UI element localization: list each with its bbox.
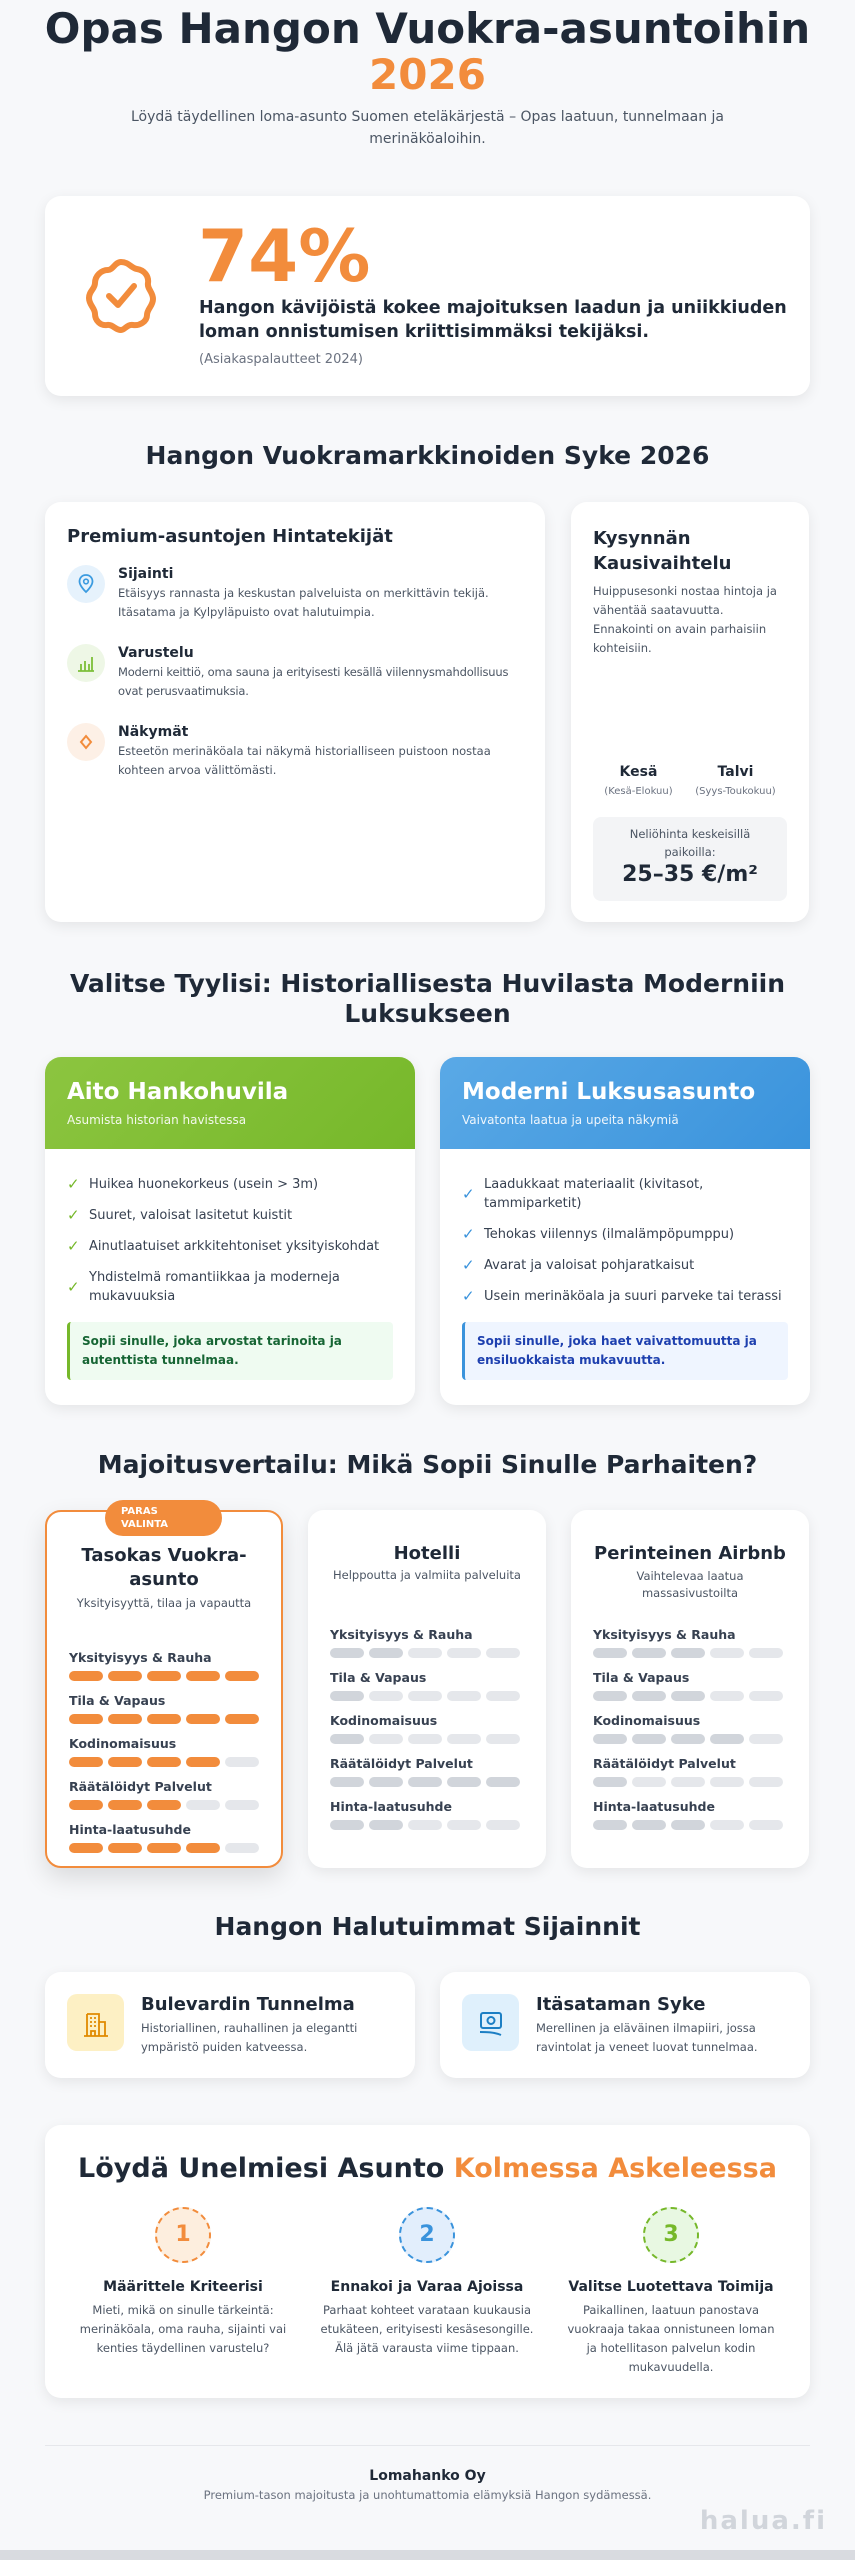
header — [440, 1057, 810, 1149]
stat number: 74% — [198, 214, 370, 298]
ratings: Tila & Vapaus — [69, 1693, 165, 1708]
description: Huippusesonki nostaa hintoja ja vähentää saatavuutta. Ennakointi on avain parhaisiin kohteisiin. — [593, 584, 777, 655]
badge: VALINTA — [121, 1519, 168, 1530]
step 2: Ennakoi ja Varaa Ajoissa — [331, 2279, 523, 2295]
subtitle: Löydä täydellinen loma-asunto Suomen eteläkärjestä – Opas laatuun, tunnelmaan ja merinäköaloihin. — [131, 109, 724, 147]
checklist: ✓ — [67, 1175, 80, 1193]
factor: varustelu: Varustelu — [118, 645, 194, 661]
panel: price factors — [45, 502, 545, 922]
step 1 — [80, 2207, 286, 2355]
panel: Perinteinen Airbnb — [571, 1510, 809, 1868]
heading: Premium-asuntojen Hintatekijät — [67, 526, 393, 547]
ratings: Kodinomaisuus — [330, 1713, 437, 1728]
callout — [67, 1322, 393, 1380]
panel: Tasokas Vuokra-asunto — [45, 1510, 283, 1868]
header: Aito Hankohuvila — [67, 1079, 288, 1105]
panel: three steps — [45, 2125, 810, 2398]
watermark: halua.fi — [700, 2506, 827, 2536]
callout: Sopii sinulle, joka haet vaivattomuutta ja ensiluokkaista mukavuutta. — [477, 1334, 757, 1367]
factor: näkymät: Näkymät — [118, 724, 188, 740]
factor: sijainti: Etäisyys rannasta ja keskustan palveluista on merkittävin tekijä. Itäsatama ja Kylpyläpuisto ovat halutuimpia. — [118, 586, 489, 619]
step 1: Määrittele Kriteerisi — [103, 2279, 263, 2295]
panel: Hotelli: Helppoutta ja valmiita palveluita — [333, 1568, 521, 1582]
step 3: Valitse Luotettava Toimija — [568, 2279, 774, 2295]
footer: Lomahanko Oy — [369, 2468, 486, 2484]
panel: Tasokas Vuokra-asunto: Yksityisyyttä, tilaa ja vapautta — [77, 1596, 251, 1610]
heading: Kysynnän Kausivaihtelu — [593, 528, 731, 574]
seasons: Kesä — [620, 764, 657, 780]
factor: sijainti — [67, 565, 489, 619]
ratings — [330, 1627, 520, 1830]
checklist: Usein merinäköala ja suuri parveke tai terassi — [484, 1289, 782, 1304]
title: Opas Hangon Vuokra-asuntoihin — [45, 4, 810, 53]
checklist: ✓ — [462, 1256, 475, 1274]
checklist: Ainutlaatuiset arkkitehtoniset yksityiskohdat — [89, 1239, 379, 1254]
stat text — [199, 298, 787, 367]
seasons: Talvi — [718, 764, 753, 780]
step 2 — [321, 2207, 533, 2355]
checklist: ✓ — [462, 1184, 475, 1202]
section heading: locations: Hangon Halutuimmat Sijainnit — [215, 1912, 640, 1941]
panel: Itäsataman Syke: Merellinen ja eläväinen ilmapiiri, jossa ravintolat ja veneet luovat tunnelmaa. — [536, 2021, 758, 2054]
step 1: Mieti, mikä on sinulle tärkeintä: merinäköala, oma rauha, sijainti vai kenties täydellinen varustelu? — [80, 2303, 286, 2355]
ratings — [592, 1627, 783, 1830]
heading: Löydä Unelmiesi Asunto Kolmessa Askeleessa — [78, 2153, 777, 2184]
checklist: ✓ — [462, 1287, 475, 1305]
panel: seasonal demand — [571, 502, 809, 922]
step 2: Parhaat kohteet varataan kuukausia etukäteen, erityisesti kesäsesongille. Älä jätä varausta viime tippaan. — [321, 2303, 533, 2355]
factor: varustelu: Moderni keittiö, oma sauna ja erityisesti kesällä viilennysmahdollisuus ovat perusvaatimuksia. — [118, 665, 508, 698]
factor: varustelu — [67, 644, 508, 698]
ratings: Tila & Vapaus — [330, 1670, 426, 1685]
stat text: Hangon kävijöistä kokee majoituksen laadun ja uniikkiuden loman onnistumisen kriittisimmäksi tekijäksi. — [199, 298, 787, 342]
ratings: Räätälöidyt Palvelut — [593, 1756, 736, 1771]
ratings: Hinta-laatusuhde — [69, 1822, 191, 1837]
ratings — [68, 1650, 259, 1853]
ratings: Kodinomaisuus — [593, 1713, 700, 1728]
factor: näkymät — [67, 723, 491, 777]
panel: Hotelli — [308, 1510, 546, 1868]
checklist: ✓ — [67, 1206, 80, 1224]
step 2: 2 — [419, 2222, 435, 2247]
seasons: (Kesä-Elokuu) — [604, 786, 673, 797]
callout — [462, 1322, 788, 1380]
panel: Aito Hankohuvila — [45, 1057, 415, 1405]
header: Moderni Luksusasunto — [462, 1079, 755, 1105]
ratings: Tila & Vapaus — [593, 1670, 689, 1685]
stat card — [45, 196, 810, 396]
title — [45, 4, 810, 99]
section heading: style — [70, 969, 785, 1028]
ratings: Räätälöidyt Palvelut — [330, 1756, 473, 1771]
step 3: 3 — [663, 2222, 679, 2247]
stat text: (Asiakaspalautteet 2024) — [199, 352, 363, 367]
icon: harbour — [462, 1994, 519, 2051]
step 1: 1 — [175, 2222, 191, 2247]
panel: Hotelli: Hotelli — [394, 1543, 460, 1564]
step 3 — [567, 2207, 775, 2374]
price box: Neliöhinta keskeisillä paikoilla: — [630, 827, 750, 859]
panel: Itäsataman Syke: Itäsataman Syke — [536, 1994, 705, 2015]
panel: Moderni Luksusasunto — [440, 1057, 810, 1405]
checklist: Yhdistelmä romantiikkaa ja moderneja mukavuuksia — [89, 1270, 340, 1304]
step 3: Paikallinen, laatuun panostava vuokraaja takaa onnistuneen loman ja hotellitason palvelun kodin mukavuudella. — [567, 2303, 775, 2374]
icon: badge check — [86, 259, 156, 333]
ratings: Yksityisyys & Rauha — [593, 1627, 736, 1642]
checklist: Suuret, valoisat lasitetut kuistit — [89, 1208, 292, 1223]
checklist: ✓ — [67, 1237, 80, 1255]
ratings: Hinta-laatusuhde — [593, 1799, 715, 1814]
icon: building — [67, 1994, 124, 2051]
price box — [593, 817, 787, 901]
checklist: ✓ — [462, 1225, 475, 1243]
panel: Bulevardin Tunnelma: Historiallinen, rauhallinen ja elegantti ympäristö puiden katveessa. — [141, 2021, 357, 2054]
section heading: style: Luksukseen — [344, 999, 511, 1028]
badge — [105, 1500, 222, 1536]
header: Vaivatonta laatua ja upeita näkymiä — [462, 1113, 679, 1127]
badge: PARAS — [121, 1506, 158, 1517]
panel: Bulevardin Tunnelma: Bulevardin Tunnelma — [141, 1994, 355, 2015]
ratings: Hinta-laatusuhde — [330, 1799, 452, 1814]
title: 2026 — [369, 50, 486, 99]
factor: näkymät: Esteetön merinäköala tai näkymä historialliseen puistoon nostaa kohteen arvoa välittömästi. — [118, 744, 491, 777]
ratings: Kodinomaisuus — [69, 1736, 176, 1751]
section heading: comparison: Majoitusvertailu: Mikä Sopii Sinulle Parhaiten? — [98, 1450, 757, 1479]
checklist: ✓ — [67, 1278, 80, 1296]
checklist: Laadukkaat materiaalit (kivitasot, tammiparketit) — [484, 1177, 703, 1211]
checklist — [67, 1175, 393, 1380]
heading: Tasokas Vuokra-asunto — [81, 1545, 247, 1590]
footer — [204, 2468, 651, 2502]
callout: Sopii sinulle, joka arvostat tarinoita ja autenttista tunnelmaa. — [82, 1334, 342, 1367]
header — [45, 1057, 415, 1149]
header: Asumista historian havistessa — [67, 1113, 246, 1127]
price box: 25–35 €/m² — [622, 862, 758, 887]
ratings: Yksityisyys & Rauha — [69, 1650, 212, 1665]
checklist: Avarat ja valoisat pohjaratkaisut — [484, 1258, 694, 1273]
panel: Bulevardin Tunnelma — [45, 1972, 415, 2078]
checklist: Huikea huonekorkeus (usein > 3m) — [89, 1177, 318, 1192]
footer: Premium-tason majoitusta ja unohtumattomia elämyksiä Hangon sydämessä. — [204, 2488, 651, 2502]
panel: Perinteinen Airbnb: Perinteinen Airbnb — [594, 1543, 786, 1564]
panel: Itäsataman Syke — [440, 1972, 810, 2078]
checklist — [462, 1177, 788, 1380]
section heading: market: Hangon Vuokramarkkinoiden Syke 2026 — [146, 441, 709, 470]
section heading: style: Valitse Tyylisi: Historiallisesta Huvilasta Moderniin — [70, 969, 785, 998]
panel: Perinteinen Airbnb: Vaihtelevaa laatua massasivustoilta — [636, 1569, 744, 1600]
factor: sijainti: Sijainti — [118, 566, 173, 582]
checklist: Tehokas viilennys (ilmalämpöpumppu) — [484, 1227, 734, 1242]
seasons: (Syys-Toukokuu) — [695, 786, 776, 797]
seasons — [604, 764, 776, 797]
ratings: Räätälöidyt Palvelut — [69, 1779, 212, 1794]
ratings: Yksityisyys & Rauha — [330, 1627, 473, 1642]
